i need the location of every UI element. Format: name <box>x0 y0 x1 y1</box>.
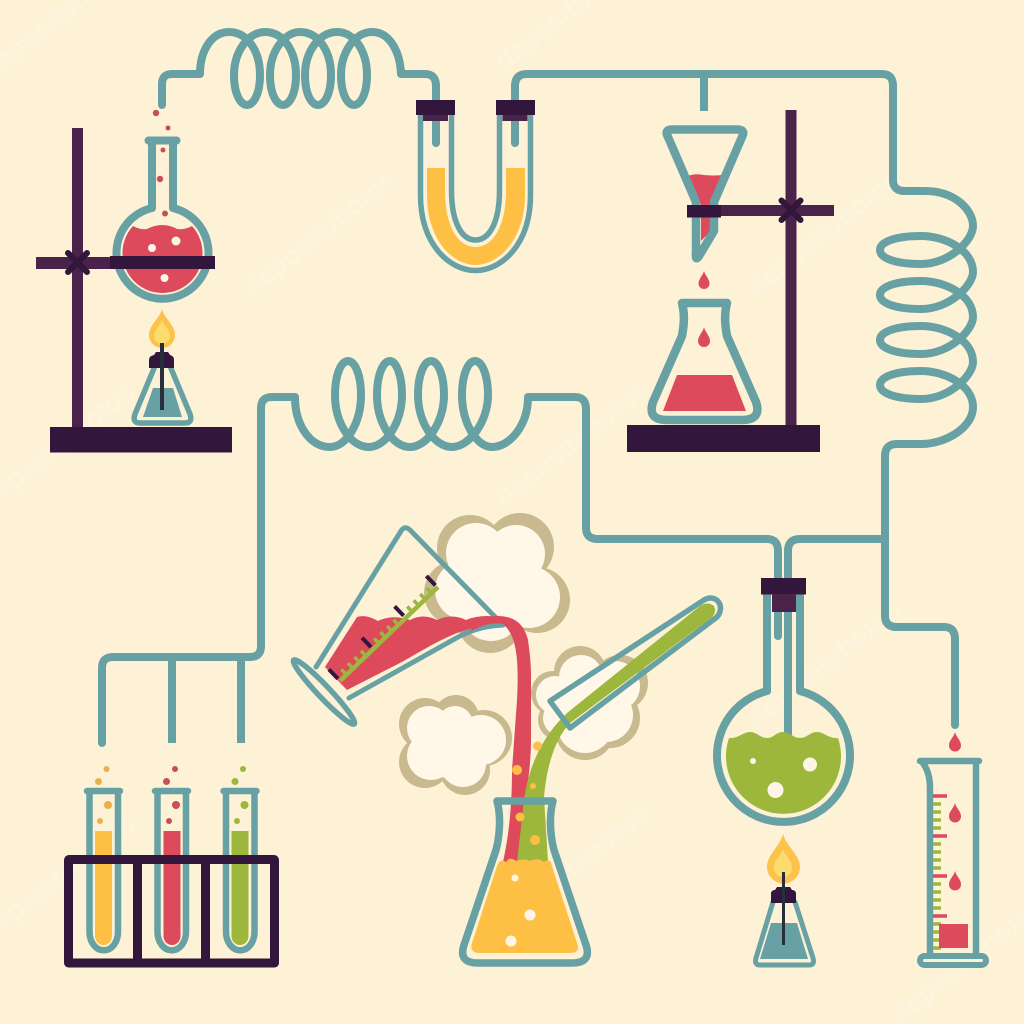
cylinder base <box>920 956 986 965</box>
green test tube <box>224 766 256 950</box>
stand base <box>627 425 820 452</box>
burner glass <box>756 902 814 965</box>
red round-bottom flask <box>110 110 215 299</box>
red liquid <box>663 375 746 411</box>
rising yellow bubbles <box>512 742 542 845</box>
yellow mixing flask <box>463 742 587 963</box>
cloud shadow <box>399 695 512 795</box>
pouring beaker <box>289 528 503 728</box>
droplets <box>232 766 248 824</box>
yellow test tube <box>87 766 120 950</box>
pipe: coil from red flask to U-tube <box>162 32 436 105</box>
droplets <box>163 766 180 824</box>
scale marks <box>933 796 947 948</box>
inlet stubs <box>436 113 515 143</box>
wick <box>160 343 164 410</box>
minor scale marks <box>933 804 941 948</box>
white bubbles <box>506 874 536 946</box>
rubber stopper <box>761 578 806 594</box>
stand rod <box>72 128 83 428</box>
flame <box>149 309 175 348</box>
bubbles <box>750 758 817 798</box>
inner flame <box>774 849 792 877</box>
droplets <box>95 766 112 824</box>
right stopper <box>496 100 535 115</box>
right spirit burner <box>756 834 814 965</box>
pipe: middle coil to test tubes and flask <box>102 361 778 743</box>
burner liquid <box>760 923 808 959</box>
ruler minor ticks <box>342 588 432 675</box>
U-tube glass <box>420 116 530 270</box>
flask glass <box>463 801 587 963</box>
pipe: feed into green flask <box>788 539 885 735</box>
drop in cylinder upper <box>949 803 961 822</box>
separating funnel <box>667 130 743 289</box>
top drop <box>949 732 961 752</box>
red liquid in beaker <box>325 616 500 690</box>
stock photo watermarks: depositphotos <box>741 164 906 302</box>
stock photo watermarks: depositphotos <box>741 595 906 733</box>
red poured stream <box>470 616 531 862</box>
flask glass <box>717 594 850 822</box>
left stopper lower <box>423 115 448 121</box>
cloud body <box>435 523 560 641</box>
cylinder glass <box>920 761 979 955</box>
stock photo watermarks: depositphotos <box>237 164 402 302</box>
clamp holding flask <box>110 256 215 269</box>
pipe: funnel feed <box>700 74 708 111</box>
pipe: U-tube to right side coil <box>515 74 973 725</box>
left spirit burner <box>134 309 191 423</box>
red conical flask <box>652 303 757 420</box>
bubbles <box>148 236 180 282</box>
cloud body <box>536 655 640 753</box>
right stopper lower <box>502 115 528 121</box>
test pipette <box>550 598 720 728</box>
ruler spine <box>340 587 438 681</box>
pipe: branches to test tubes <box>172 657 241 743</box>
beaker glass <box>316 528 503 698</box>
falling drop <box>698 271 710 289</box>
wick <box>782 872 785 945</box>
stand rod <box>786 110 796 426</box>
left stopper <box>416 100 455 115</box>
test tube rack <box>68 860 274 963</box>
flame <box>767 834 800 884</box>
flask glass <box>116 140 209 299</box>
test tubes in rack <box>68 766 274 963</box>
cloud shadow <box>531 646 648 760</box>
funnel glass <box>667 130 743 258</box>
red liquid level <box>939 924 968 948</box>
funnel clamp <box>687 205 721 218</box>
red liquid in funnel <box>688 174 722 241</box>
stand base <box>50 427 232 452</box>
right ring stand <box>627 110 834 452</box>
smoke cloud: lower left <box>399 695 512 795</box>
stand clamp arm <box>36 257 112 269</box>
green round-bottom flask <box>717 578 850 822</box>
burner cap <box>149 352 174 368</box>
drop in cylinder lower <box>949 871 961 890</box>
measuring cylinder <box>920 732 986 965</box>
U-tube with yellow liquid <box>416 100 535 270</box>
cloud shadow <box>424 513 570 653</box>
glass <box>87 791 120 950</box>
stock photo watermarks: depositphotos <box>489 375 654 513</box>
glass <box>155 791 188 950</box>
clamp knot <box>782 200 800 220</box>
green poured stream <box>517 604 715 862</box>
red test tube <box>155 766 188 950</box>
ruler major ticks <box>329 576 435 679</box>
inner flame <box>154 320 170 344</box>
beaker base <box>289 656 359 728</box>
flask glass <box>652 303 757 420</box>
glass <box>224 791 256 950</box>
drop in flask <box>698 327 710 347</box>
green liquid <box>726 732 841 814</box>
liquid <box>95 831 112 945</box>
cloud body <box>407 706 506 787</box>
major scale marks <box>933 796 947 916</box>
rising red droplets <box>153 110 170 216</box>
beaker ruler <box>329 576 438 681</box>
yellow liquid <box>471 859 578 953</box>
clamp arm <box>720 205 834 216</box>
stopper lower <box>772 594 796 612</box>
liquid <box>232 831 248 945</box>
yellow liquid <box>427 168 525 265</box>
smoke cloud: right <box>531 646 648 760</box>
burner glass <box>134 366 191 423</box>
burner cap <box>771 887 796 903</box>
smoke cloud: upper <box>424 513 570 653</box>
red liquid <box>122 225 202 293</box>
left ring stand <box>36 128 232 452</box>
clamp knot <box>68 253 87 272</box>
liquid <box>164 831 180 945</box>
stock photo watermarks: depositphotos <box>489 799 654 937</box>
connecting pipes and coils <box>102 32 973 743</box>
burner liquid <box>143 388 182 417</box>
